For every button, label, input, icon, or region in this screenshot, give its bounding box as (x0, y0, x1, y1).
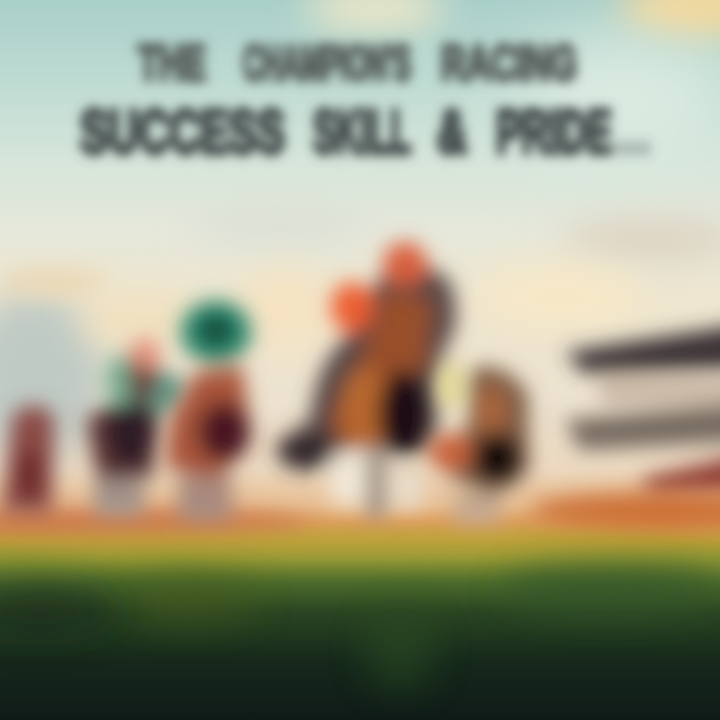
heading line 2: blurred title text (80, 98, 651, 167)
horse and jockey: lead (274, 242, 456, 518)
horse and jockey: far left (2, 406, 54, 512)
horse and jockey: second (86, 339, 187, 516)
heading line 2: blurred title text: PRIDE (496, 98, 612, 167)
heading line 2: blurred title text: & (437, 98, 467, 167)
heading line 1: blurred title text: THE (138, 35, 206, 91)
grandstand on the right (565, 322, 720, 494)
heading line 1: blurred title text: CHAMPION'S (243, 35, 411, 91)
heading line 2: blurred title text: SUCCESS (80, 98, 285, 167)
heading line 1: blurred title text: RACING (441, 35, 577, 91)
heading line 2: blurred title text: ... (615, 98, 651, 167)
sun glow and clouds (0, 0, 720, 460)
foreground grass highlights (0, 536, 720, 690)
heading line 2: blurred title text: SKILL (313, 98, 411, 167)
horse and jockey: right (428, 361, 528, 524)
horse and jockey: green silks (166, 301, 252, 522)
track glow (0, 492, 720, 536)
